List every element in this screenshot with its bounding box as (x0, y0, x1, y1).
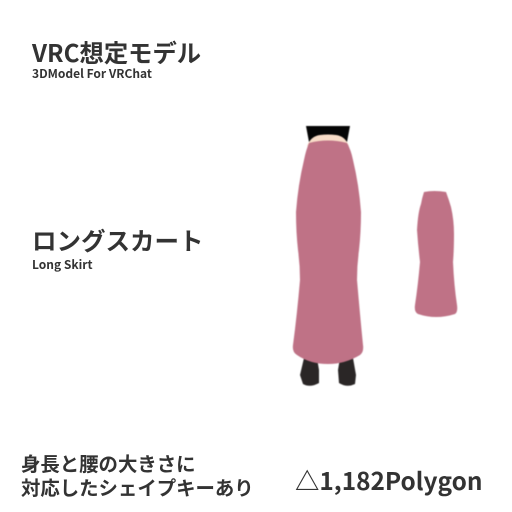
feature description: 身長と腰の大きさに (21, 448, 196, 477)
left shoe (300, 358, 319, 386)
cream waistband (307, 134, 349, 146)
right shoe (338, 358, 356, 386)
long skirt (293, 140, 363, 364)
feature description (21, 448, 254, 500)
black top at waist (306, 126, 350, 142)
feature description: 対応したシェイプキーあり (21, 472, 254, 500)
title: VRC想定モデル (32, 34, 201, 69)
product name: ロングスカート (32, 223, 204, 258)
subtitle: 3DModel For VRChat (32, 65, 152, 82)
polygon count: △1,182Polygon (295, 463, 482, 498)
product name in English: Long Skirt (32, 256, 93, 273)
